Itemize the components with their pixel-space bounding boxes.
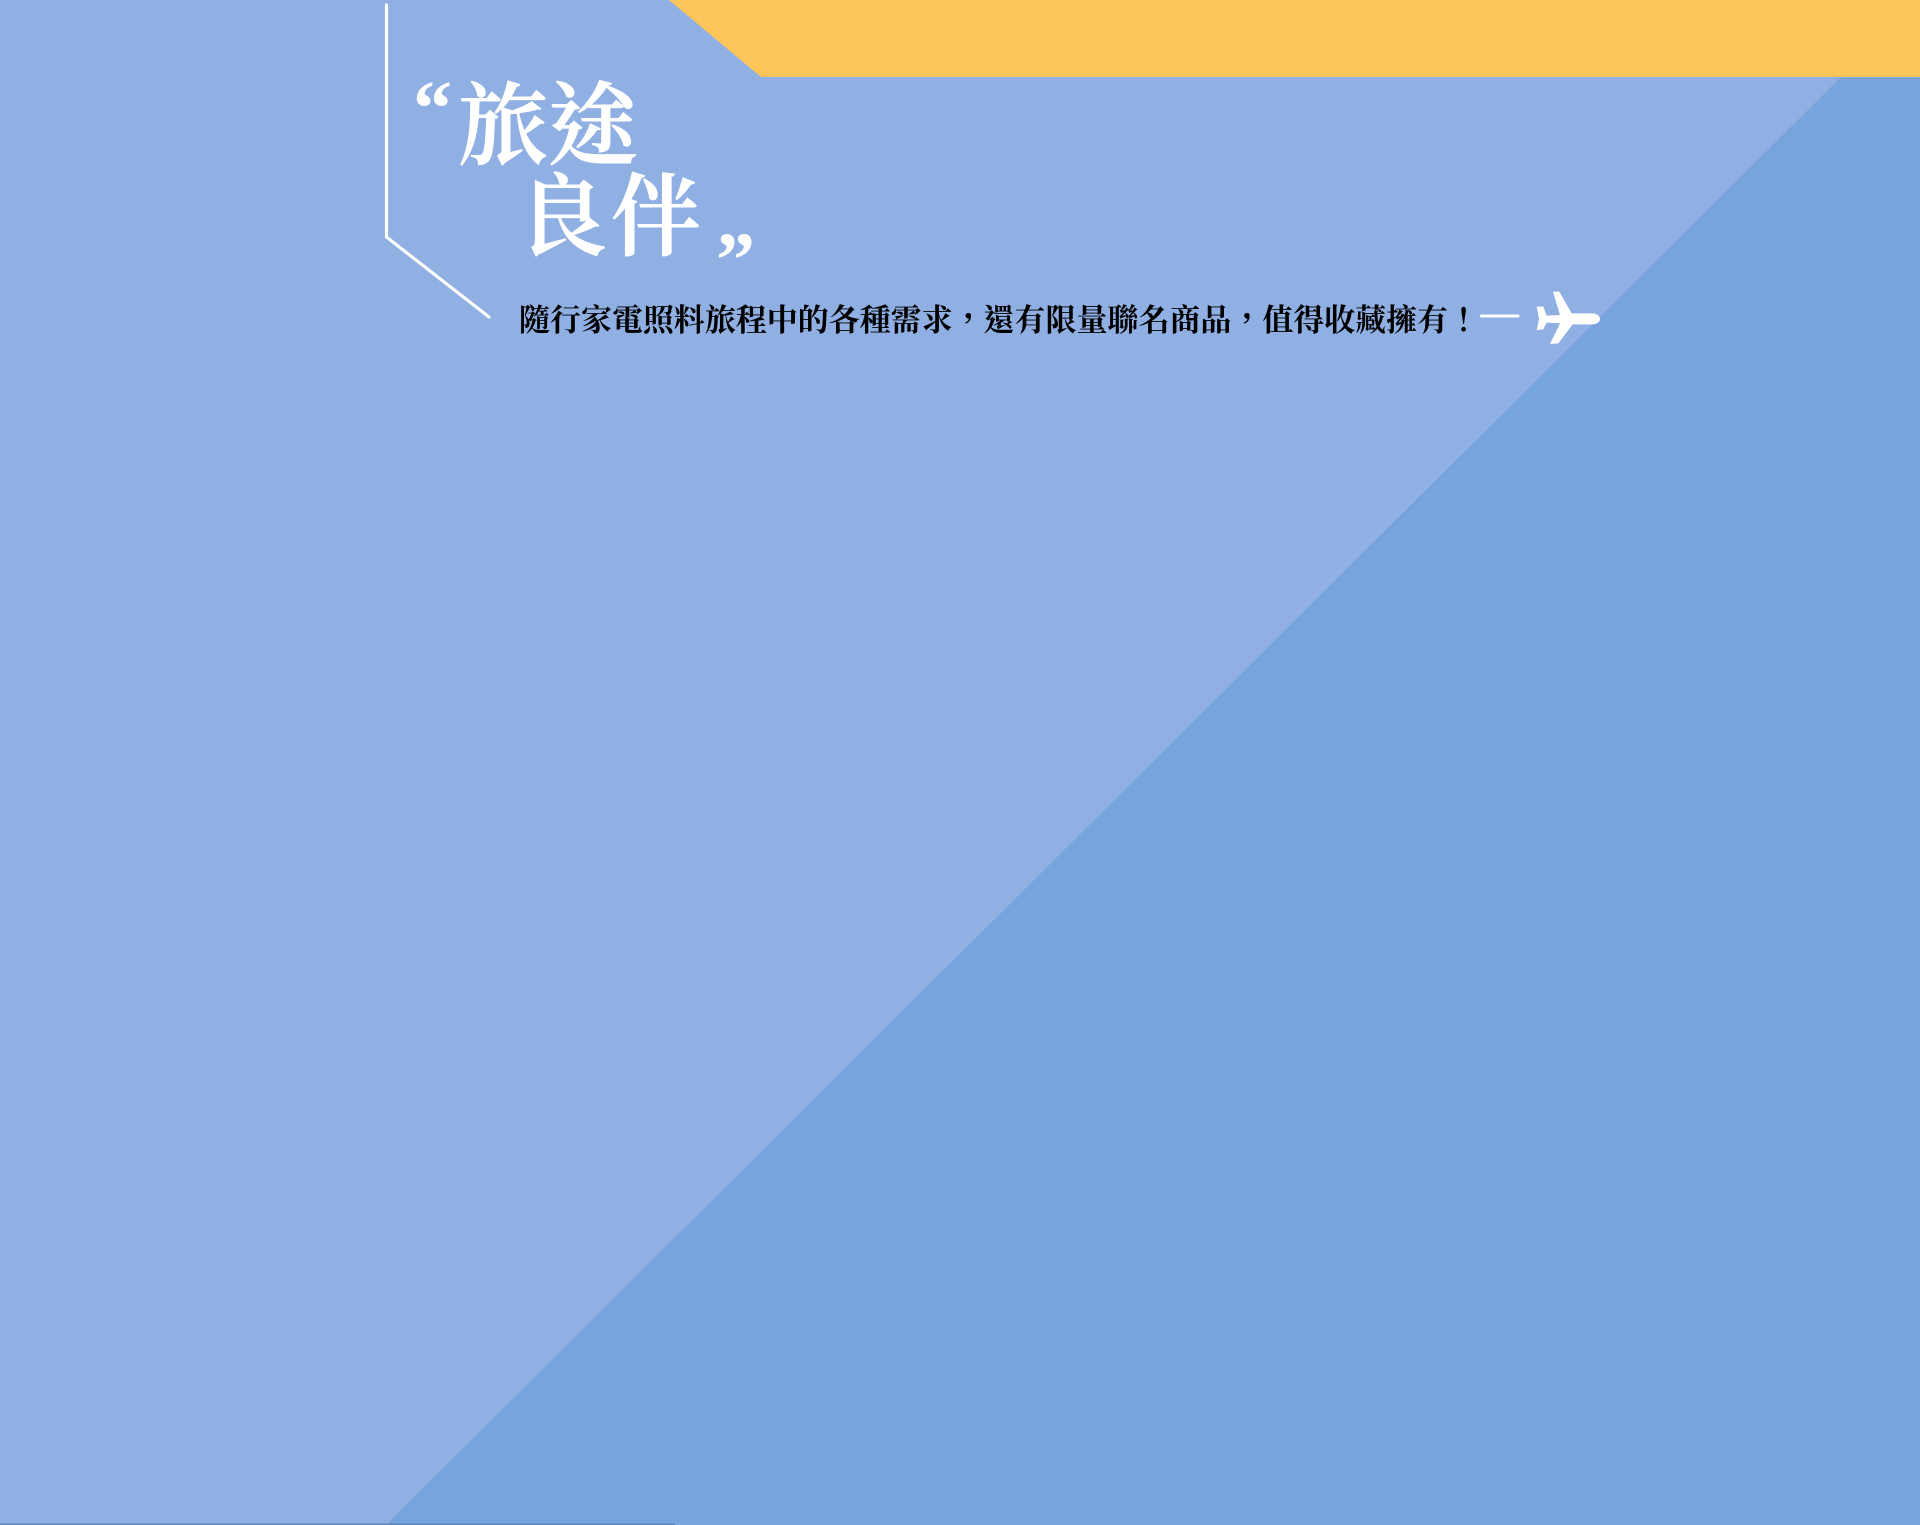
orange top banner: [669, 0, 1920, 77]
subtitle text: 隨行家電照料旅程中的各種需求，還有限量聯名商品，值得收藏擁有！: [519, 303, 1479, 338]
title: [413, 64, 755, 303]
dash before plane icon: [1482, 314, 1518, 318]
title line two: 良伴: [517, 169, 705, 268]
background: darker blue diagonal panel: [386, 77, 1920, 1525]
bottom edge line: [0, 1524, 675, 1525]
white bracket line: [386, 5, 489, 317]
title opening quote: “: [413, 64, 452, 152]
icon: airplane: [1537, 292, 1600, 344]
title closing quote: ”: [716, 216, 755, 303]
title line one: 旅途: [458, 78, 642, 177]
